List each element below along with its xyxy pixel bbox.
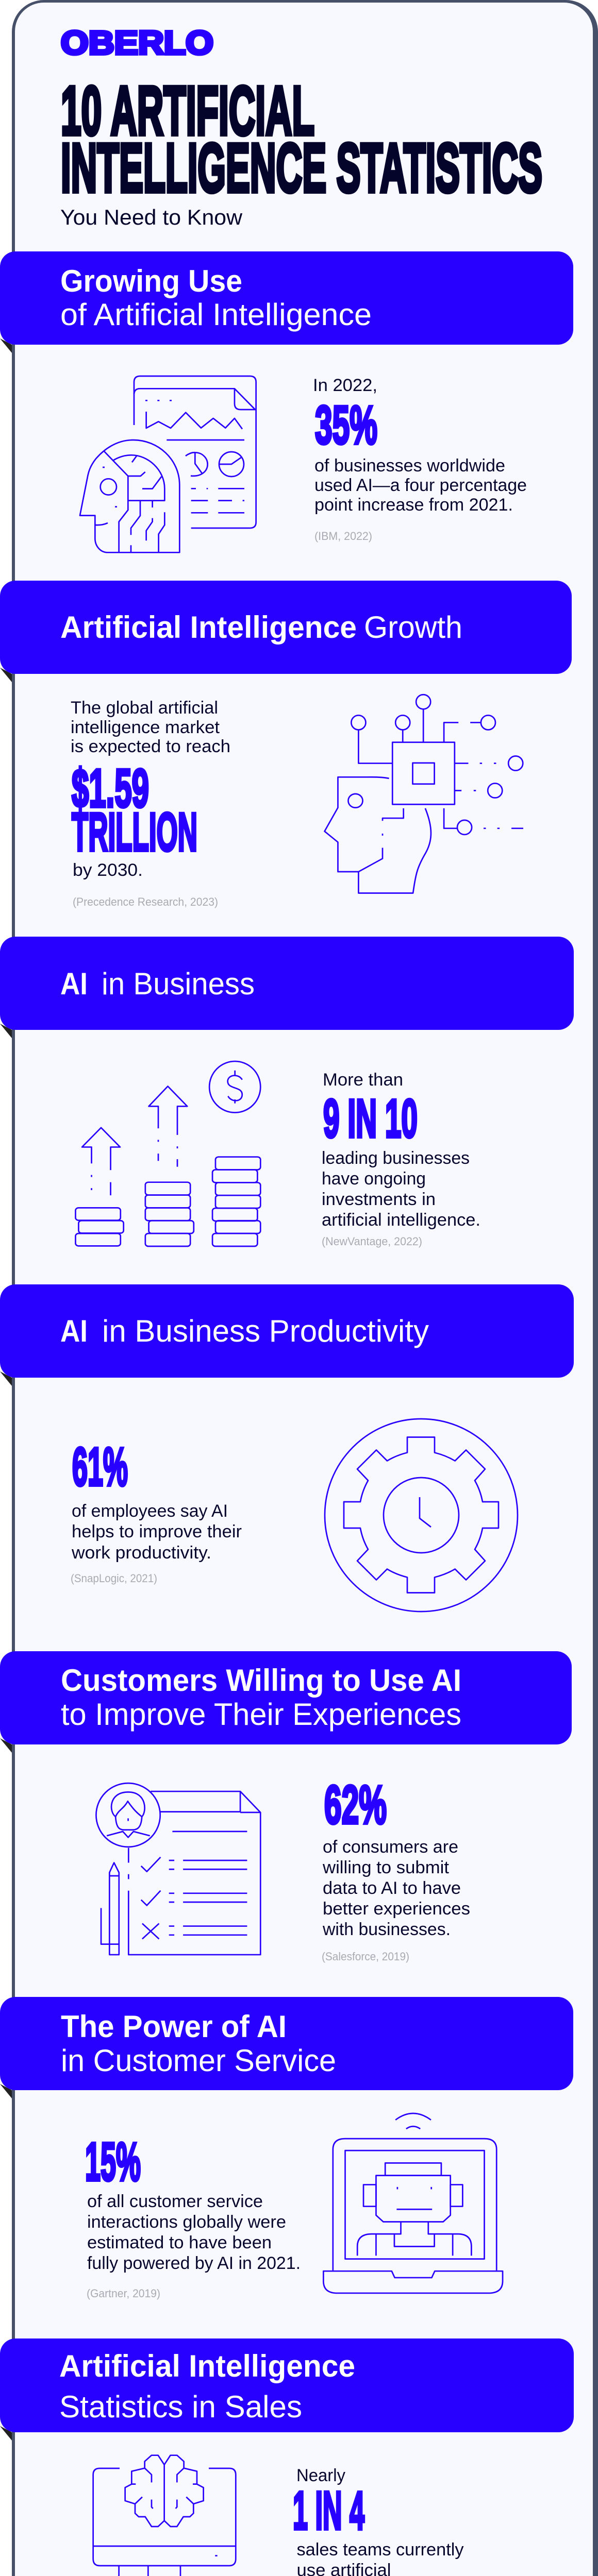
stat: 15%: of all customer service (87, 2192, 263, 2211)
stat: 62%: (Salesforce, 2019) (322, 1950, 409, 1963)
section: customers (0, 1651, 572, 1963)
banner: Customers Willing to Use AI (0, 1651, 572, 1753)
banner: AI in Business: AI (60, 967, 88, 1001)
icon: robot on laptop (323, 2113, 503, 2293)
stat: $1.59 trillion: TRILLION (72, 802, 197, 862)
title: 10 ARTIFICIAL (61, 73, 314, 149)
stat: 9 in 10: 9 IN 10 (323, 1089, 418, 1149)
icon: brain on computer (86, 2455, 239, 2576)
stat: 15%: interactions globally were (87, 2212, 286, 2232)
stat: 15%: (Gartner, 2019) (87, 2287, 160, 2300)
stat: 62%: 62% (324, 1775, 387, 1835)
stat: 1 in 4: sales teams currently (297, 2540, 464, 2560)
stat: 15%: 15% (85, 2132, 141, 2192)
stat: 9 in 10: leading businesses (322, 1148, 470, 1168)
stat: 9 in 10: have ongoing (322, 1169, 426, 1189)
stat: 15%: estimated to have been (87, 2233, 272, 2252)
stat: 35%: of businesses worldwide (314, 456, 505, 476)
stat: $1.59 trillion: is expected to reach (71, 737, 230, 756)
icon: AI head with report (80, 376, 256, 552)
banner: AI in Business (0, 937, 574, 1038)
banner: Artificial Intelligence Growth: Growth (364, 610, 462, 645)
stat: 1 in 4: Nearly (296, 2466, 345, 2485)
section: customer service (0, 1997, 573, 2300)
stat: $1.59 trillion: The global artificial (71, 698, 218, 718)
banner: Growing Use: Growing Use (60, 264, 242, 298)
subtitle: You Need to Know (60, 205, 243, 229)
stat: 61%: work productivity. (71, 1543, 211, 1563)
stat: 35%: In 2022, (313, 376, 377, 395)
stat: $1.59 trillion (71, 698, 230, 908)
banner: AI in Business Productivity: in Business Productivity (102, 1314, 429, 1348)
stat: 62%: of consumers are (323, 1837, 458, 1857)
banner: AI statistics in sales: Statistics in Sales (59, 2389, 302, 2424)
stat: $1.59 trillion: (Precedence Research, 2023) (73, 895, 218, 908)
banner: AI in Business Productivity: AI (60, 1314, 88, 1348)
stat: 62%: willing to submit (322, 1858, 450, 1877)
logo: Oberlo: OBERLO (61, 24, 213, 61)
banner: AI in Business: in Business (102, 967, 255, 1001)
stat: 1 in 4 (293, 2466, 484, 2576)
stat: 9 in 10: More than (323, 1070, 403, 1090)
stat: 35%: point increase from 2021. (314, 495, 513, 515)
icon: head with chip (325, 694, 523, 893)
stat: 35% (313, 376, 527, 543)
section: AI growth (0, 581, 572, 908)
section: growing use (0, 251, 573, 552)
banner: The Power of AI (0, 1997, 573, 2098)
icon: coin stacks with arrows (75, 1061, 260, 1246)
banner: Growing Use (0, 251, 573, 353)
stat: 61% (71, 1437, 242, 1585)
section: AI in business (0, 937, 574, 1248)
stat: 1 in 4: 1 IN 4 (293, 2481, 364, 2541)
stat: $1.59 trillion: by 2030. (73, 860, 143, 880)
banner: Customers Willing to Use AI: to Improve Their Experiences (61, 1697, 461, 1732)
stat: 61%: helps to improve their (72, 1522, 242, 1541)
stat: 61%: 61% (72, 1437, 128, 1497)
banner: Artificial Intelligence Growth (0, 581, 572, 682)
title (61, 73, 542, 207)
stat: 62%: with businesses. (322, 1920, 451, 1939)
stat: 62%: better experiences (323, 1899, 470, 1919)
stat: 9 in 10: artificial intelligence. (322, 1210, 480, 1230)
stat: $1.59 trillion: $1.59 (72, 758, 149, 819)
icon: gear with clock (325, 1419, 518, 1612)
banner: Growing Use: of Artificial Intelligence (60, 297, 372, 332)
section: sales (0, 2338, 574, 2576)
stat: $1.59 trillion: intelligence market (71, 718, 220, 737)
banner: The Power of AI: The Power of AI (61, 2009, 287, 2044)
stat: 35%: (IBM, 2022) (314, 530, 372, 543)
banner: AI statistics in sales (0, 2338, 574, 2441)
stat: 9 in 10: (NewVantage, 2022) (322, 1235, 422, 1248)
banner: Customers Willing to Use AI: Customers Willing to Use AI (61, 1663, 461, 1698)
stat: 35%: 35% (315, 395, 377, 455)
stat: 15% (85, 2132, 301, 2300)
stat: 9 in 10 (322, 1070, 480, 1248)
section: productivity (0, 1284, 574, 1612)
stat: 15%: fully powered by AI in 2021. (87, 2253, 301, 2273)
banner: AI in Business Productivity (0, 1284, 574, 1386)
stat: 35%: used AI—a four percentage (314, 476, 527, 495)
banner: The Power of AI: in Customer Service (61, 2043, 336, 2078)
stat: 62% (322, 1775, 470, 1963)
stat: 61%: (SnapLogic, 2021) (71, 1572, 157, 1585)
stat: 62%: data to AI to have (323, 1878, 461, 1898)
stat: 9 in 10: investments in (322, 1190, 436, 1209)
banner: Artificial Intelligence Growth: Artificial Intelligence (60, 610, 357, 645)
icon: customer checklist (96, 1783, 260, 1955)
stat: 61%: of employees say AI (72, 1501, 228, 1521)
banner: AI statistics in sales: Artificial Intelligence (59, 2349, 355, 2383)
